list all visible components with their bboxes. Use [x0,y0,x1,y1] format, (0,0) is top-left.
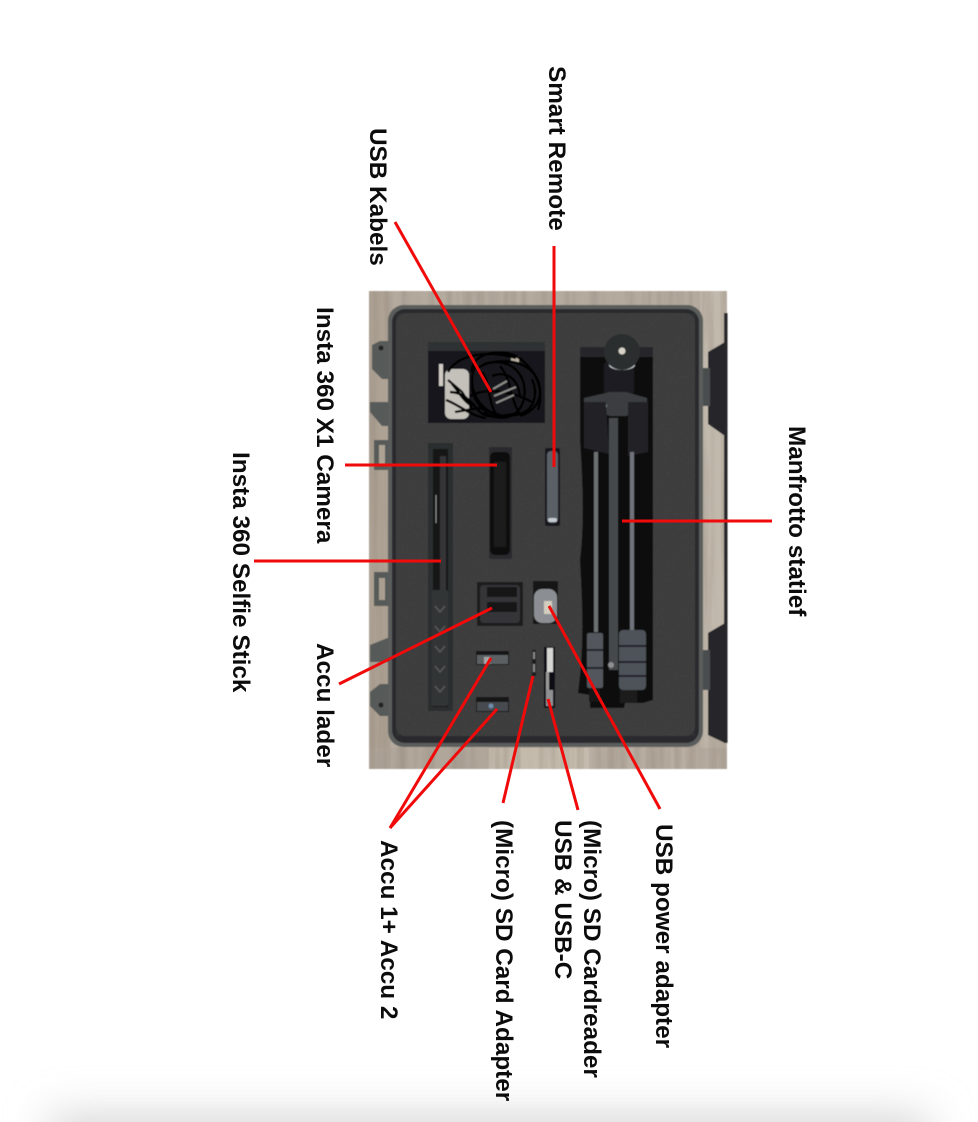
label: (Micro) SD Cardreader USB & USB-C [549,820,605,1078]
page bottom shadow gradient [50,1118,928,1122]
label: Smart Remote: Smart Remote [543,66,570,231]
foam texture [396,313,695,736]
case rim [388,305,703,747]
case lid hinges [702,313,728,743]
arrow: Smart Remote [552,246,556,467]
label: Insta 360 X1 Camera: Insta 360 X1 Camera [311,307,338,544]
label: Accu lader: Accu lader [311,643,338,768]
cutout: Insta 360 X1 camera [489,447,512,559]
cutout: USB power adapter [533,581,558,624]
arrow: USB Kabels [395,222,491,392]
cutout: SD card reader [544,647,555,708]
pointer lines [254,222,772,828]
label: (Micro) SD Card Adapter: (Micro) SD Card Adapter [490,820,517,1102]
arrow: USB power adapter [549,606,660,809]
cutout: smart remote [545,448,560,526]
label: Manfrotto statief: Manfrotto statief [783,426,810,617]
cutout: accu 1 [476,651,509,665]
arrow: Insta 360 X1 Camera [345,464,497,466]
cutout: selfie stick [428,443,453,711]
label: Insta 360 Selfie Stick: Insta 360 Selfie Stick [227,452,254,693]
cutout: SD card adapter [532,650,536,676]
arrow: SD card adapter [503,676,533,803]
arrow: SD cardreader [548,699,578,810]
wood background [369,291,727,769]
case latches [370,341,390,716]
tripod head [584,334,647,416]
label: (Micro) SD Cardreader USB & USB-C: USB & USB-C [549,820,576,979]
arrow: Insta 360 Selfie Stick [254,560,441,562]
label: (Micro) SD Cardreader USB & USB-C: (Micro) SD Cardreader [578,820,605,1078]
photo of the open equipment case [369,291,728,769]
label: USB Kabels: USB Kabels [364,128,391,266]
arrow: Accu lader [339,608,492,684]
foam insert [396,313,695,736]
label: Accu 1+ Accu 2: Accu 1+ Accu 2 [375,840,402,1019]
cutout: USB cables [428,342,545,423]
arrow: Manfrotto statief [622,520,772,522]
cutout: accu 2 [476,697,509,712]
arrow: Accu 2 [390,709,497,828]
tripod legs [584,402,648,703]
cutout: Manfrotto tripod [578,334,653,708]
cutout: battery charger [477,582,523,626]
arrow: Accu 1 [390,658,491,828]
label: USB power adapter: USB power adapter [650,824,677,1049]
